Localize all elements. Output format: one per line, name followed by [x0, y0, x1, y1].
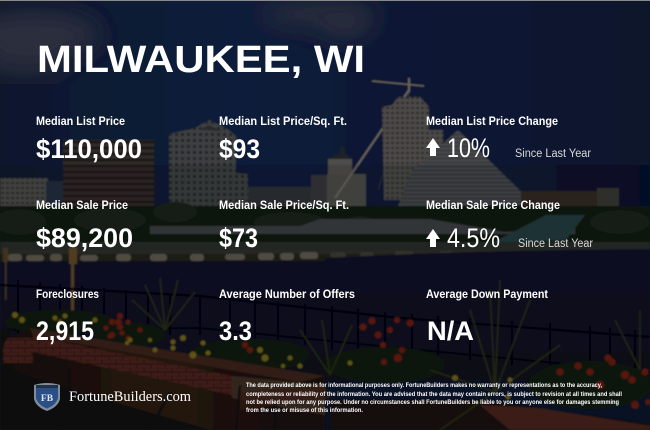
mid-rise row — [248, 187, 328, 212]
stat: median list price per square foot: Median List Price/Sq. Ft. — [219, 114, 347, 128]
disclaimer text: The data provided above is for informational purposes only. FortuneBuilders makes no warranty or representations as to the accuracy, — [246, 382, 602, 389]
central tower — [169, 120, 248, 212]
cable-stayed mast and cables — [335, 78, 424, 198]
left low building — [0, 178, 48, 212]
raised brick planter — [0, 328, 650, 430]
sky — [0, 0, 650, 240]
stat: median list price per square foot: $93 — [219, 134, 260, 164]
stat: median list price change: Since Last Year — [515, 148, 591, 160]
title: MILWAUKEE, WI — [37, 39, 365, 81]
stat: median list price — [36, 114, 142, 164]
tiki torches — [3, 248, 77, 322]
domed building — [327, 147, 366, 208]
stat: median sale price: $89,200 — [36, 223, 133, 253]
overall darkening of the lower scene — [0, 165, 650, 430]
stat: median list price change — [426, 114, 591, 163]
clouds — [0, 0, 380, 76]
dark patio floor and chairs — [0, 328, 275, 430]
stat: median sale price per square foot: Median Sale Price/Sq. Ft. — [219, 198, 349, 212]
icon: shield: FB — [41, 394, 54, 404]
white museum wing — [150, 219, 575, 234]
foliage along fence — [5, 310, 650, 409]
art museum roof — [398, 130, 535, 206]
top edge line — [0, 0, 650, 1]
disclaimer text: from the use or misuse of this information. — [246, 407, 363, 414]
stat: median sale price change: Since Last Year — [518, 238, 593, 250]
stat: median sale price change — [426, 198, 593, 253]
stat: median list price change: 10% — [447, 133, 490, 163]
icon: up arrow — [426, 138, 440, 156]
residential tower — [382, 97, 443, 200]
red flowers — [104, 313, 650, 409]
stat: foreclosures: Foreclosures — [36, 287, 99, 301]
disclaimer text — [246, 382, 622, 414]
stat: median list price per square foot — [219, 114, 347, 164]
right low buildings — [521, 191, 601, 207]
disclaimer text: completeness or reliability of the information. You are advised that the data may contain errors, is subject to revision at all times and shall — [246, 391, 622, 398]
leafy plants — [132, 278, 640, 430]
stat: average number of offers: Average Number of Offers — [219, 287, 355, 301]
tree and shore band — [0, 206, 650, 242]
stat: median sale price per square foot: $73 — [219, 223, 258, 253]
stat: median sale price change: 4.5% — [447, 223, 500, 253]
icon: shield — [34, 383, 60, 411]
stat: median list price: Median List Price — [36, 114, 125, 128]
stat: average number of offers: 3.3 — [219, 316, 252, 346]
icon: up arrow — [426, 229, 440, 247]
stat: median list price: $110,000 — [36, 134, 142, 164]
stat: foreclosures — [36, 287, 99, 346]
wordmark: FortuneBuilders.com — [69, 389, 191, 405]
stat: average down payment — [426, 287, 548, 346]
stat: average number of offers — [219, 287, 355, 346]
promenade — [0, 242, 650, 251]
stat: median list price change: Median List Price Change — [426, 114, 558, 128]
stat: median sale price per square foot — [219, 198, 349, 253]
yellow flowers — [12, 312, 512, 400]
iron fence — [0, 280, 650, 372]
lake water — [0, 261, 650, 381]
stat: median sale price change: Median Sale Price Change — [426, 198, 560, 212]
stat: foreclosures: 2,915 — [36, 316, 94, 346]
stat: median sale price: Median Sale Price — [36, 198, 128, 212]
stat: average down payment: Average Down Payment — [426, 287, 548, 301]
disclaimer text: not be relied upon for any purpose. Under no circumstances shall FortuneBuilders be liable to you or anyone else for damages stemming — [246, 399, 619, 406]
dark brown building — [63, 140, 154, 212]
stat: median sale price — [36, 198, 133, 253]
logo: FortuneBuilders — [34, 383, 191, 411]
stat: average down payment: N/A — [427, 316, 474, 346]
rock shoreline — [0, 251, 650, 262]
